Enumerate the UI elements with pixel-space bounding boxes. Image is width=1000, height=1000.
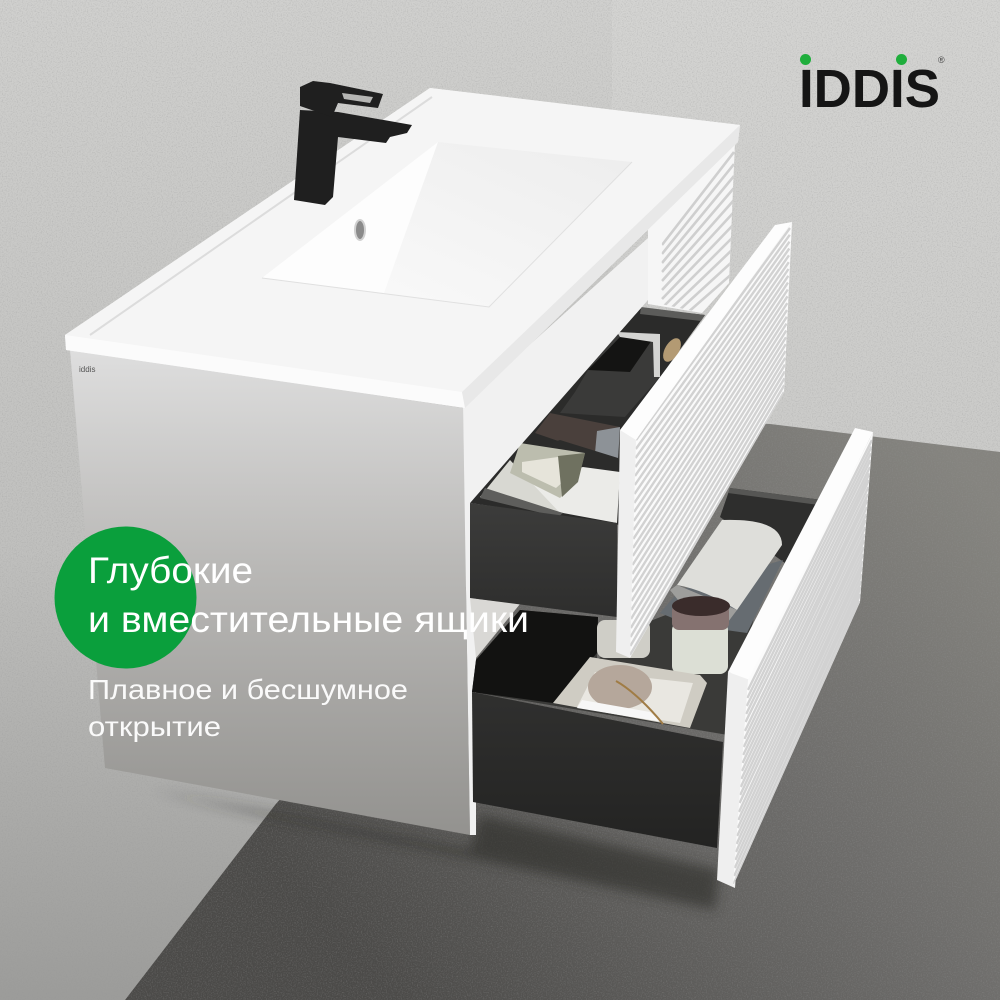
pumice stone [588,665,652,709]
green circle [54,526,196,668]
countertop sink [65,88,740,408]
subheading: Плавное и бесшумное [88,674,408,705]
towel [490,467,620,523]
white ribbed towel [677,520,782,610]
logo: IDDIS: ® [938,55,945,65]
logo: IDDIS: IDDIS [799,59,940,119]
grey towel [660,560,783,633]
tray [553,657,707,728]
faucet [294,81,412,205]
lower drawer side [472,692,723,848]
jar [672,596,730,674]
heading: и вместительные ящики [88,599,529,640]
back fluted cabinet side [648,145,735,313]
vanity cabinet [65,81,873,888]
heading [88,550,529,640]
side panel [70,350,470,835]
subheading [88,674,408,742]
sponge [659,335,685,365]
overflow drain [355,220,365,240]
glass soap dish [510,443,585,498]
lower drawer back and interior [472,488,822,735]
floor [125,420,1000,1000]
lower drawer fluted front [717,428,873,888]
upper drawer interior [470,307,705,525]
brush [535,413,620,460]
upper drawer side [470,503,617,617]
small logo on side panel: iddis [79,365,95,374]
storage box [560,332,660,417]
heading: Глубокие [88,550,253,591]
right wall [612,0,1000,452]
basin [262,142,632,307]
cabinet front post and rail [463,238,648,835]
leg [597,620,650,658]
comb [480,488,563,517]
upper drawer fluted front [616,222,792,658]
tray under dish [480,460,560,513]
subheading: открытие [88,711,221,742]
shadow under cabinet [150,790,720,910]
left wall [0,0,612,1000]
